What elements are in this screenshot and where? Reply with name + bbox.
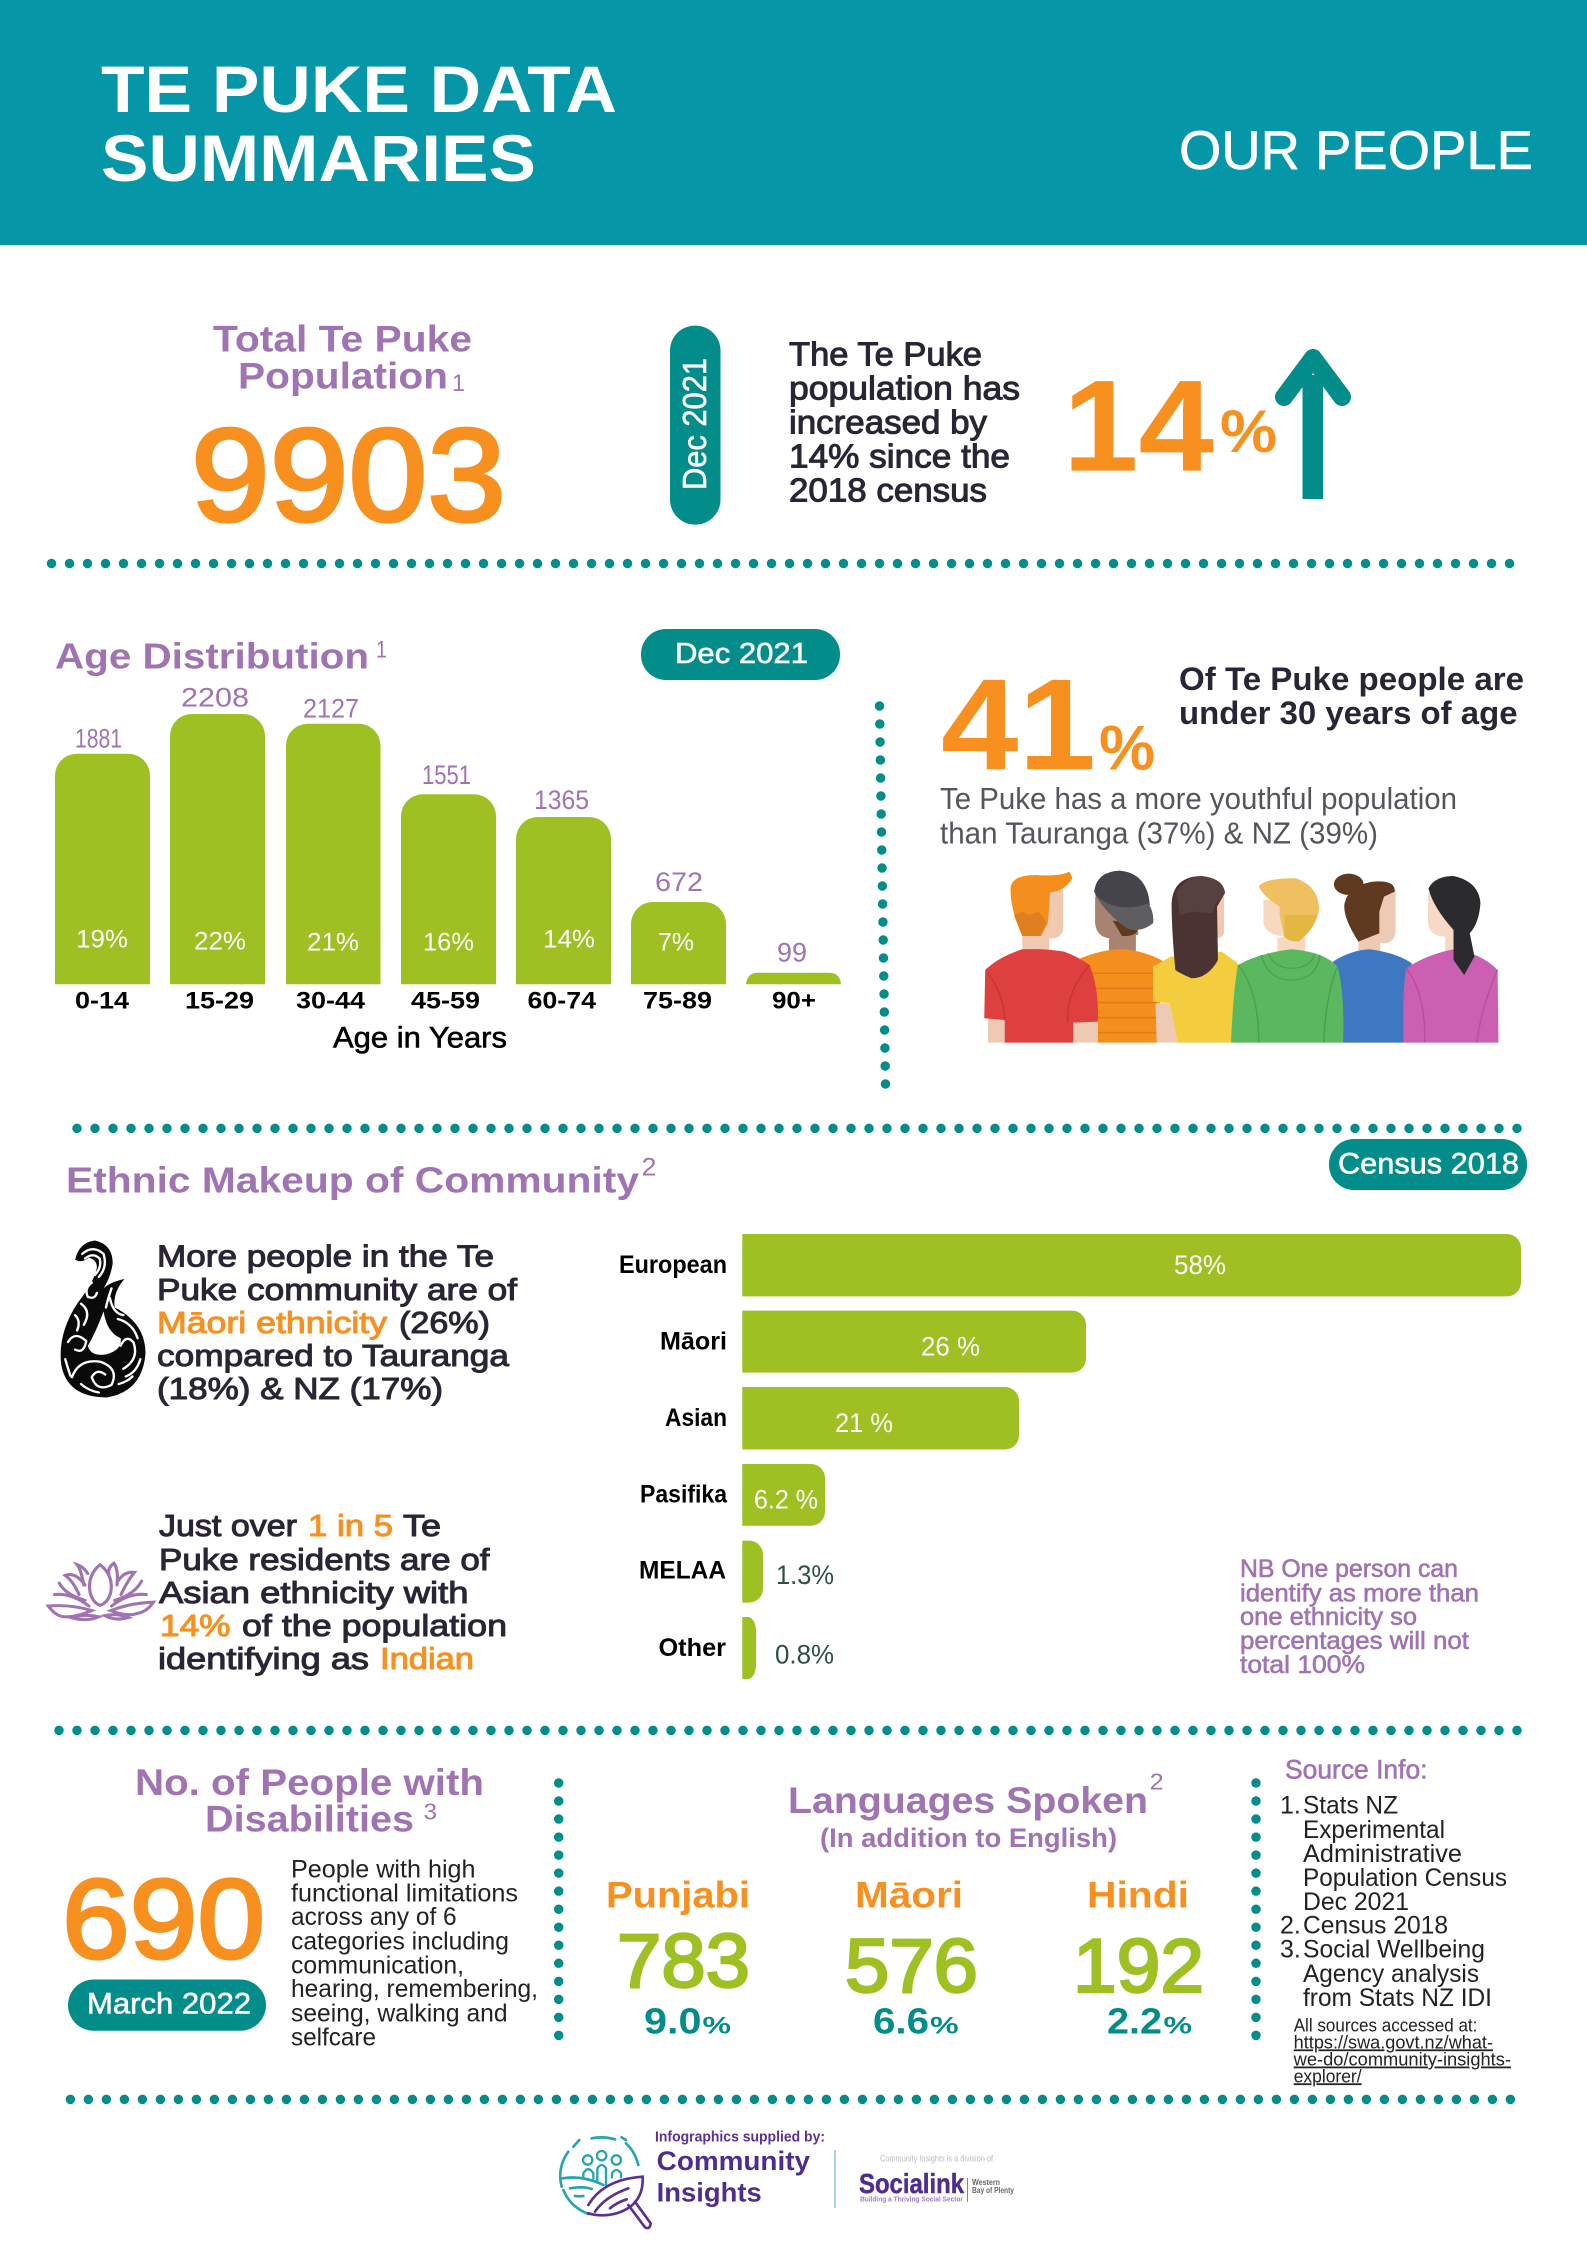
bar percentages: 19% <box>76 926 128 954</box>
text: functional limitations: across any of 6 <box>291 1903 457 1931</box>
note: multiple ethnicities: percentages will not <box>1240 1627 1469 1655</box>
source link: https://swa.govt.nz/what- <box>1294 2032 1493 2052</box>
person: red shirt, orange hair <box>984 872 1098 1043</box>
source list: Experimental <box>1303 1816 1445 1844</box>
text: under 30: under 30 years of age <box>1179 695 1518 731</box>
title <box>101 52 617 195</box>
text: functional limitations: seeing, walking and <box>291 1999 508 2027</box>
logo text: community insights: Insights <box>657 2178 762 2208</box>
panel: source info <box>1280 1755 1511 2086</box>
source list <box>1280 1792 1507 2012</box>
text: under 30 <box>1179 661 1524 731</box>
ethnicity values: 1.3% <box>776 1560 834 1590</box>
bar values: 2127 <box>303 694 359 724</box>
heading: total population: 1 <box>452 370 465 397</box>
icon: up arrow <box>1284 358 1342 499</box>
person: blue shirt, brown bun <box>1333 874 1412 1043</box>
text: population increase: 14% since the <box>789 438 1010 475</box>
text: Asian ethnicity: Te <box>403 1508 441 1543</box>
heading: disabilities: Disabilities <box>205 1798 414 1840</box>
source list: from Stats NZ IDI <box>1303 1984 1492 2012</box>
age axis labels: 90+ <box>772 987 816 1014</box>
source list: Stats NZ <box>1303 1792 1398 1820</box>
title: SUMMARIES <box>101 121 536 195</box>
note: multiple ethnicities: identify as more than <box>1240 1579 1479 1607</box>
subtitle: our people: OUR PEOPLE <box>1179 119 1533 181</box>
bar percentages: 22% <box>194 927 246 955</box>
logo text: community insights: Community <box>657 2146 810 2176</box>
heading: age distribution: Age Distribution <box>55 635 369 676</box>
source list: Social Wellbeing <box>1303 1936 1485 1964</box>
date pill: dec 2021: Dec 2021 <box>675 638 808 670</box>
stat: 41 percent: 41 <box>941 651 1096 797</box>
text: functional limitations <box>291 1855 538 2051</box>
source link: we-do/community-insights- <box>1293 2050 1511 2070</box>
text: Māori ethnicity: More people in the Te <box>157 1239 494 1274</box>
note: multiple ethnicities: one ethnicity so <box>1240 1603 1417 1631</box>
stat: Hindi: 192 <box>1073 1924 1204 2009</box>
stat: Punjabi <box>606 1874 750 2041</box>
age axis labels: 0-14 <box>75 987 130 1014</box>
source list: Population Census <box>1303 1864 1507 1892</box>
ethnicity labels: Pasifika <box>640 1481 728 1509</box>
stat: 41 percent <box>941 651 1155 797</box>
text: population increase <box>789 336 1020 508</box>
stat: 9903: 9903 <box>191 402 506 549</box>
stat: Punjabi: 783 <box>617 1919 750 2004</box>
note: multiple ethnicities: total 100% <box>1240 1651 1365 1679</box>
age axis labels: 15-29 <box>185 987 254 1014</box>
source list: 3. <box>1280 1936 1301 1964</box>
bar values <box>75 683 807 968</box>
age axis labels: 60-74 <box>528 987 597 1014</box>
stat: Punjabi: 9.0 <box>644 2000 702 2041</box>
text: functional limitations: communication, <box>291 1951 464 1979</box>
text: youthful comparison: Te Puke has a more youthful population <box>940 781 1457 816</box>
date pill: dec 2021 <box>641 629 840 680</box>
footer logos <box>560 2130 1014 2228</box>
text: infographics supplied by: Infographics supplied by: <box>655 2130 825 2146</box>
bar values: 1551 <box>422 760 471 790</box>
logo: socialink <box>859 2168 1014 2204</box>
heading: languages <box>788 1769 1164 1853</box>
stat: Hindi <box>1073 1874 1204 2041</box>
stat: 14 percent: % <box>1220 398 1277 465</box>
stat: Māori: Māori <box>855 1874 963 1916</box>
icon: lotus flower <box>48 1563 153 1620</box>
bar values: 1881 <box>75 724 122 754</box>
source list: Dec 2021 <box>1303 1888 1409 1916</box>
heading: languages: Languages Spoken <box>788 1780 1148 1821</box>
text: under 30: Of Te Puke people are <box>1179 661 1524 697</box>
header banner <box>0 0 1587 245</box>
heading: total population <box>213 318 472 397</box>
text: population increase: 2018 census <box>789 471 987 508</box>
source list: 2. <box>1280 1912 1301 1940</box>
text: Asian ethnicity: Asian ethnicity with <box>159 1575 468 1610</box>
note: multiple ethnicities: NB One person can <box>1240 1555 1458 1583</box>
text: Asian ethnicity: identifying as <box>158 1641 369 1676</box>
age axis labels: 30-44 <box>296 987 366 1014</box>
stat: 690: 690 <box>62 1856 265 1982</box>
text: Māori ethnicity: compared to Tauranga <box>157 1338 510 1373</box>
heading: source info: Source Info: <box>1285 1755 1428 1785</box>
ethnicity values: 58% <box>1174 1250 1226 1280</box>
bar percentages <box>76 926 694 957</box>
source list: Census 2018 <box>1303 1912 1448 1940</box>
logo text: community insights <box>657 2146 810 2208</box>
title: TE PUKE DATA <box>101 52 617 126</box>
stat: 41 percent: % <box>1099 713 1155 783</box>
bar percentages: 16% <box>423 929 474 957</box>
source link: All sources accessed at: <box>1294 2015 1477 2035</box>
text: Asian ethnicity: 1 in 5 <box>308 1508 393 1543</box>
bar values: 1365 <box>534 785 589 815</box>
text: Māori ethnicity: Māori ethnicity <box>157 1305 388 1340</box>
ethnicity labels <box>619 1251 728 1662</box>
heading: disabilities: 3 <box>424 1798 437 1824</box>
age axis labels: 45-59 <box>411 987 480 1014</box>
text: Māori ethnicity: (26%) <box>399 1305 490 1340</box>
logo: socialink: Socialink <box>859 2168 964 2199</box>
icon: Māori hei matau carving <box>61 1241 146 1397</box>
panel: disabilities <box>62 1762 538 2051</box>
text: division note: Community Insights is a division of <box>880 2154 993 2165</box>
note: multiple ethnicities <box>1240 1555 1479 1679</box>
stat: Māori <box>845 1874 978 2041</box>
bar chart: age distribution <box>55 683 841 1054</box>
heading: age distribution: 1 <box>376 637 387 664</box>
stat: Punjabi: % <box>702 2012 731 2039</box>
text: functional limitations: People with high <box>291 1855 476 1883</box>
stat: 14 percent <box>1063 353 1277 499</box>
person: yellow shirt, long dark hair <box>1153 876 1238 1043</box>
text: Asian ethnicity: Puke residents are of <box>159 1542 490 1577</box>
bar values: 2208 <box>181 683 249 713</box>
heading: total population: Population <box>238 356 448 396</box>
ethnicity values: 0.8% <box>775 1639 834 1669</box>
heading: total population: Total Te Puke <box>213 318 472 360</box>
date pill: census 2018 <box>1329 1139 1527 1190</box>
bar values: 99 <box>777 938 807 968</box>
stat: Hindi: Hindi <box>1087 1874 1189 1916</box>
stat: Māori: 576 <box>845 1924 978 2009</box>
vertical date pill <box>670 326 720 525</box>
text: Asian ethnicity: Indian <box>380 1641 474 1676</box>
logo: socialink: Building a Thriving Social Sector <box>860 2195 963 2204</box>
bar chart: ethnic makeup <box>619 1234 1521 1679</box>
heading: disabilities <box>135 1762 484 1840</box>
icon: community insights magnifier <box>560 2137 651 2228</box>
ethnicity labels: MELAA <box>639 1556 726 1584</box>
panel: total population <box>191 318 506 549</box>
logo: socialink: Western <box>972 2178 1000 2187</box>
stat: Hindi: 2.2 <box>1107 2000 1162 2041</box>
ethnicity values: 6.2 % <box>754 1484 818 1514</box>
text: Māori ethnicity: Puke community are of <box>157 1272 517 1307</box>
text: population increase: The Te Puke <box>789 336 982 373</box>
heading: languages: 2 <box>1150 1769 1164 1795</box>
source list: Agency analysis <box>1303 1960 1479 1988</box>
logo: socialink: Bay of Plenty <box>972 2186 1014 2195</box>
axis title: Age in Years <box>333 1021 507 1054</box>
ethnicity values: 21 % <box>835 1408 893 1438</box>
illustration: group of six people from behind <box>984 871 1499 1043</box>
ethnicity values <box>754 1250 1226 1669</box>
bar percentages: 7% <box>658 929 694 957</box>
age axis labels <box>75 987 816 1014</box>
source link: explorer/ <box>1294 2066 1362 2086</box>
bar percentages: 21% <box>307 929 359 957</box>
text: functional limitations: categories including <box>291 1927 509 1955</box>
text: Asian ethnicity <box>158 1508 507 1676</box>
text: youthful comparison <box>940 781 1457 850</box>
bar percentages: 14% <box>543 926 595 954</box>
vertical date pill: Dec 2021 <box>676 358 713 490</box>
stat: 14 percent: 14 <box>1063 353 1214 499</box>
date pill: march 2022 <box>68 1980 266 2031</box>
text: population increase: population has <box>789 370 1020 407</box>
panel: languages spoken <box>606 1769 1204 2041</box>
text: Asian ethnicity: of the population <box>242 1608 507 1643</box>
text: functional limitations: selfcare <box>291 2023 376 2051</box>
date pill: census 2018: Census 2018 <box>1338 1148 1519 1181</box>
source list: Administrative <box>1303 1840 1462 1868</box>
date pill: march 2022: March 2022 <box>87 1988 251 2021</box>
bar values: 672 <box>655 867 703 897</box>
heading: languages: (In addition to English) <box>820 1823 1117 1853</box>
text: Asian ethnicity: Just over <box>159 1508 297 1543</box>
heading: ethnic makeup: 2 <box>642 1154 656 1182</box>
stat: Māori: % <box>930 2012 959 2039</box>
ethnicity labels: Māori <box>660 1328 727 1356</box>
ethnicity labels: European <box>619 1251 727 1279</box>
text: functional limitations: hearing, remembering, <box>291 1975 538 2003</box>
ethnicity labels: Other <box>658 1634 726 1662</box>
person: purple top, black ponytail <box>1403 876 1499 1043</box>
heading: disabilities: No. of People with <box>135 1762 484 1803</box>
text: Asian ethnicity: 14% <box>160 1608 230 1643</box>
text: population increase: increased by <box>789 404 988 441</box>
text: functional limitations: functional limitations <box>291 1880 518 1908</box>
text: youthful comparison: than Tauranga (37%) & NZ (39%) <box>940 815 1378 850</box>
age axis labels: 75-89 <box>643 987 712 1014</box>
ethnicity values: 26 % <box>921 1332 980 1362</box>
source list: 1. <box>1280 1792 1301 1820</box>
ethnicity labels: Asian <box>665 1404 727 1432</box>
stat: Hindi: % <box>1164 2012 1192 2039</box>
heading: ethnic makeup: Ethnic Makeup of Community <box>66 1160 639 1201</box>
text: Māori ethnicity: (18%) & NZ (17%) <box>157 1371 443 1406</box>
person: orange striped shirt, grey cap <box>1080 871 1164 1043</box>
source link <box>1293 2015 1511 2086</box>
stat: Punjabi: Punjabi <box>606 1874 750 1916</box>
person: green hoodie, blond hair <box>1231 878 1343 1043</box>
stat: Māori: 6.6 <box>873 2000 929 2041</box>
text: Māori ethnicity <box>157 1239 517 1406</box>
